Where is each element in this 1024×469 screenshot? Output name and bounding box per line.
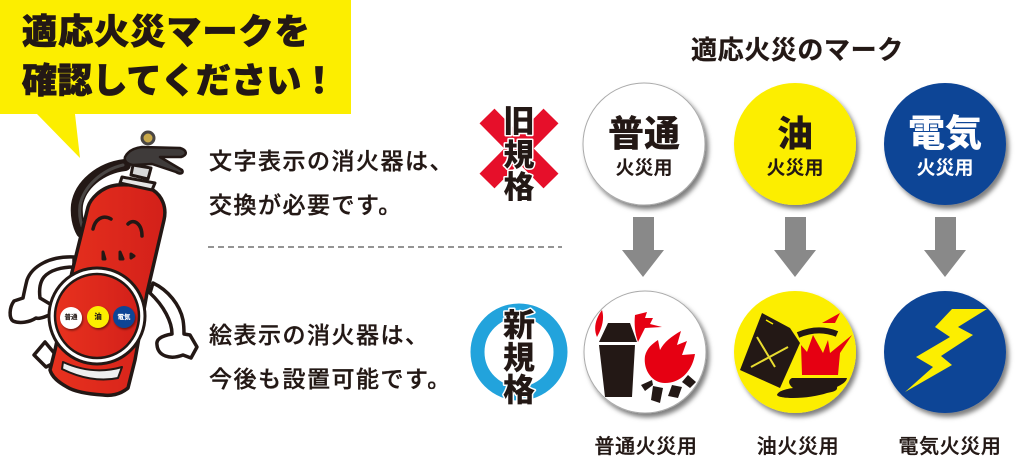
label: oil fire: 油火災用	[757, 435, 839, 458]
old standard label with red cross: 旧	[504, 104, 534, 139]
text: old standard note: 交換が必要です。	[209, 192, 403, 218]
bottom band	[62, 362, 122, 380]
collar	[120, 177, 155, 190]
icon: ordinary fire pictogram	[584, 291, 706, 413]
mark: ordinary fire, text: 普通	[608, 113, 680, 154]
badge plate	[49, 268, 145, 364]
mascot: fire extinguisher character	[10, 132, 197, 395]
new standard label with blue ring	[478, 307, 560, 408]
text: new standard note	[209, 322, 452, 392]
new standard label with blue ring: 格	[503, 372, 535, 408]
foot white	[34, 342, 60, 367]
icon: electric fire pictogram	[884, 291, 1006, 413]
speech bubble heading	[0, 0, 351, 158]
right arm	[150, 283, 197, 358]
ring	[142, 132, 154, 144]
face	[93, 217, 142, 236]
mark: electric fire, text	[884, 83, 1006, 205]
heading: marks: 適応火災のマーク	[691, 35, 904, 65]
text: old standard note: 文字表示の消火器は、	[209, 148, 454, 174]
text: old standard note	[209, 148, 454, 218]
mark: electric fire, text: 火災用	[916, 158, 974, 179]
arrow: oil	[774, 217, 816, 277]
mark: oil fire, text: 火災用	[766, 158, 824, 179]
text: new standard note: 今後も設置可能です。	[209, 366, 452, 392]
mark: oil fire, text	[734, 83, 856, 205]
arrow: electric	[924, 217, 966, 277]
handle	[125, 147, 186, 173]
new standard label with blue ring: 規	[503, 340, 535, 376]
mark: ordinary fire, text	[583, 83, 705, 205]
mark: ordinary fire, text: 火災用	[615, 158, 673, 179]
text: new standard note: 絵表示の消火器は、	[209, 322, 430, 348]
small marks	[60, 306, 135, 329]
label: electric fire: 電気火災用	[898, 435, 1002, 458]
icon: oil fire pictogram	[734, 291, 856, 413]
old standard label with red cross: 規	[504, 138, 534, 173]
small marks: 電気	[118, 312, 131, 321]
old standard label with red cross: 格	[504, 170, 534, 205]
small marks: 普通	[64, 312, 78, 321]
speech bubble heading: 確認してください！	[22, 62, 337, 101]
label: ordinary fire: 普通火災用	[594, 435, 698, 458]
old standard label with red cross	[487, 104, 551, 205]
small marks: 油	[94, 311, 102, 321]
hose	[77, 165, 125, 232]
mark: oil fire, text: 油	[777, 113, 813, 154]
mark: electric fire, text: 電気	[908, 113, 982, 154]
left arm	[10, 257, 74, 322]
new standard label with blue ring: 新	[503, 307, 535, 343]
arrow: ordinary	[622, 217, 664, 277]
body	[50, 185, 165, 395]
speech bubble heading: 適応火災マークを	[22, 13, 311, 52]
